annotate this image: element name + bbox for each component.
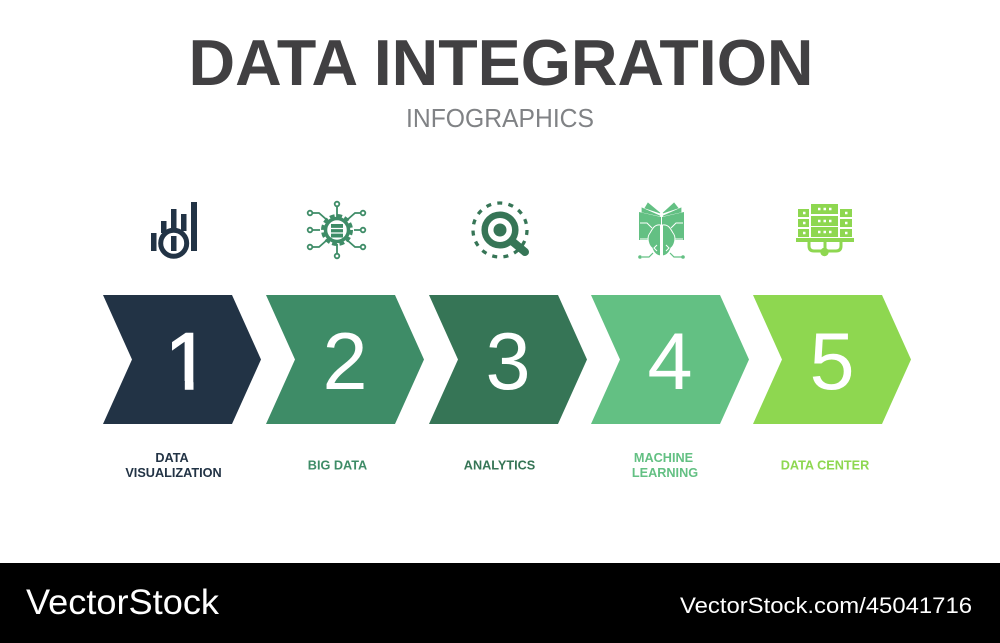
arrow 2: 2: [322, 317, 368, 407]
arrow 4: 4: [647, 317, 693, 407]
label: data center: DATA CENTER: [781, 458, 869, 472]
subtitle: INFOGRAPHICS: [406, 103, 594, 133]
arrow 4: [591, 295, 749, 424]
icon: gear with circuit nodes: [308, 202, 365, 258]
arrow 3: 3: [485, 317, 531, 407]
label: data visualization: VISUALIZATION: [125, 466, 222, 480]
label: machine learning: MACHINE: [634, 451, 693, 465]
icon: book with brain: [638, 203, 685, 259]
footer bar: [0, 563, 1000, 643]
label: machine learning: LEARNING: [632, 466, 698, 480]
footer bar: VectorStock.com/45041716: [680, 593, 972, 618]
arrow 5: 5: [809, 317, 855, 407]
arrow 2: [266, 295, 424, 424]
label: data visualization: DATA: [155, 451, 189, 465]
icon: bar chart with magnifier: [151, 202, 197, 256]
icon: magnifier with dashed ring: [473, 203, 527, 257]
arrow 5: [753, 295, 911, 424]
label: analytics: ANALYTICS: [464, 458, 535, 472]
arrow 3: [429, 295, 587, 424]
title: DATA INTEGRATION: [188, 26, 814, 99]
arrow 1: 1: [165, 317, 210, 407]
icon: server racks: [796, 204, 854, 256]
label: big data: BIG DATA: [308, 458, 367, 472]
arrow 1: [103, 295, 261, 424]
footer bar: VectorStock: [26, 583, 220, 622]
